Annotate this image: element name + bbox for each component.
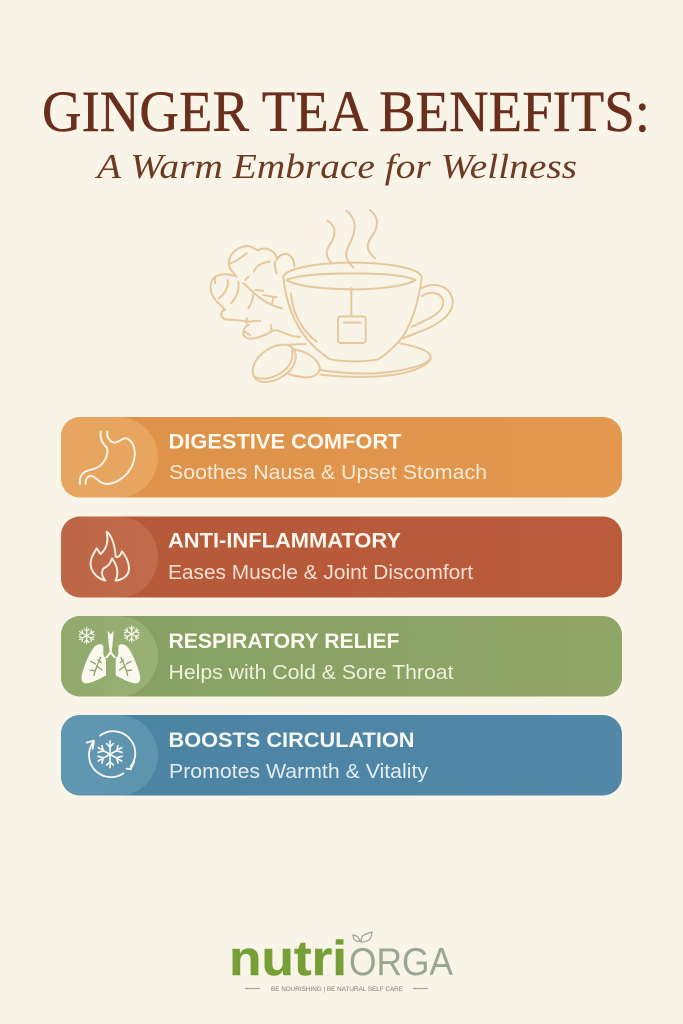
panel: anti-inflammatory xyxy=(50,516,622,598)
icon panel: anti-inflammatory xyxy=(61,516,158,598)
icon: flame xyxy=(91,532,129,581)
heading: anti-inflammatory: ANTI-INFLAMMATORY xyxy=(168,528,401,552)
text: circulation: Promotes Warmth & Vitality xyxy=(169,761,428,783)
panel: digestive comfort xyxy=(50,417,622,498)
icon panel: respiratory xyxy=(61,616,158,696)
title: GINGER TEA BENEFITS: xyxy=(42,79,650,144)
heading: digestive comfort: DIGESTIVE COMFORT xyxy=(168,430,402,454)
text: respiratory: Helps with Cold & Sore Throat xyxy=(168,662,454,684)
icon panel: circulation xyxy=(61,715,158,796)
panel: boosts circulation xyxy=(50,715,622,796)
text: digestive: Soothes Nausa & Upset Stomach xyxy=(169,462,487,484)
illustration: ginger and tea cup xyxy=(211,210,453,382)
tagline: BE NOURISHING | BE NATURAL SELF CARE xyxy=(271,986,403,993)
icon: saucer xyxy=(290,343,431,377)
icon: circular arrows and snowflake xyxy=(87,731,135,777)
subtitle: A Warm Embrace for Wellness xyxy=(95,147,577,186)
icon: stomach xyxy=(80,432,135,484)
icon: snowflake left xyxy=(79,628,94,644)
icon: ginger root xyxy=(211,246,317,342)
icon: leaf sprout xyxy=(353,932,372,942)
panel: respiratory relief xyxy=(50,616,622,697)
text: anti-inflammatory: Eases Muscle & Joint Discomfort xyxy=(168,562,473,584)
icon: lungs and snowflakes xyxy=(79,626,140,683)
heading: respiratory relief: RESPIRATORY RELIEF xyxy=(168,629,400,653)
icon: cup xyxy=(283,263,453,361)
icon: tea bag xyxy=(338,288,366,343)
icon panel: digestive xyxy=(61,417,158,498)
logo word: ORGA: ORGA xyxy=(349,941,453,984)
heading: boosts circulation: BOOSTS CIRCULATION xyxy=(168,728,414,752)
icon: steam xyxy=(327,210,377,268)
icon: ginger slices xyxy=(253,345,320,382)
icon: snowflake right xyxy=(124,626,139,642)
logo: nutriORGA xyxy=(229,932,453,993)
logo word: nutri: nutri xyxy=(229,932,347,986)
